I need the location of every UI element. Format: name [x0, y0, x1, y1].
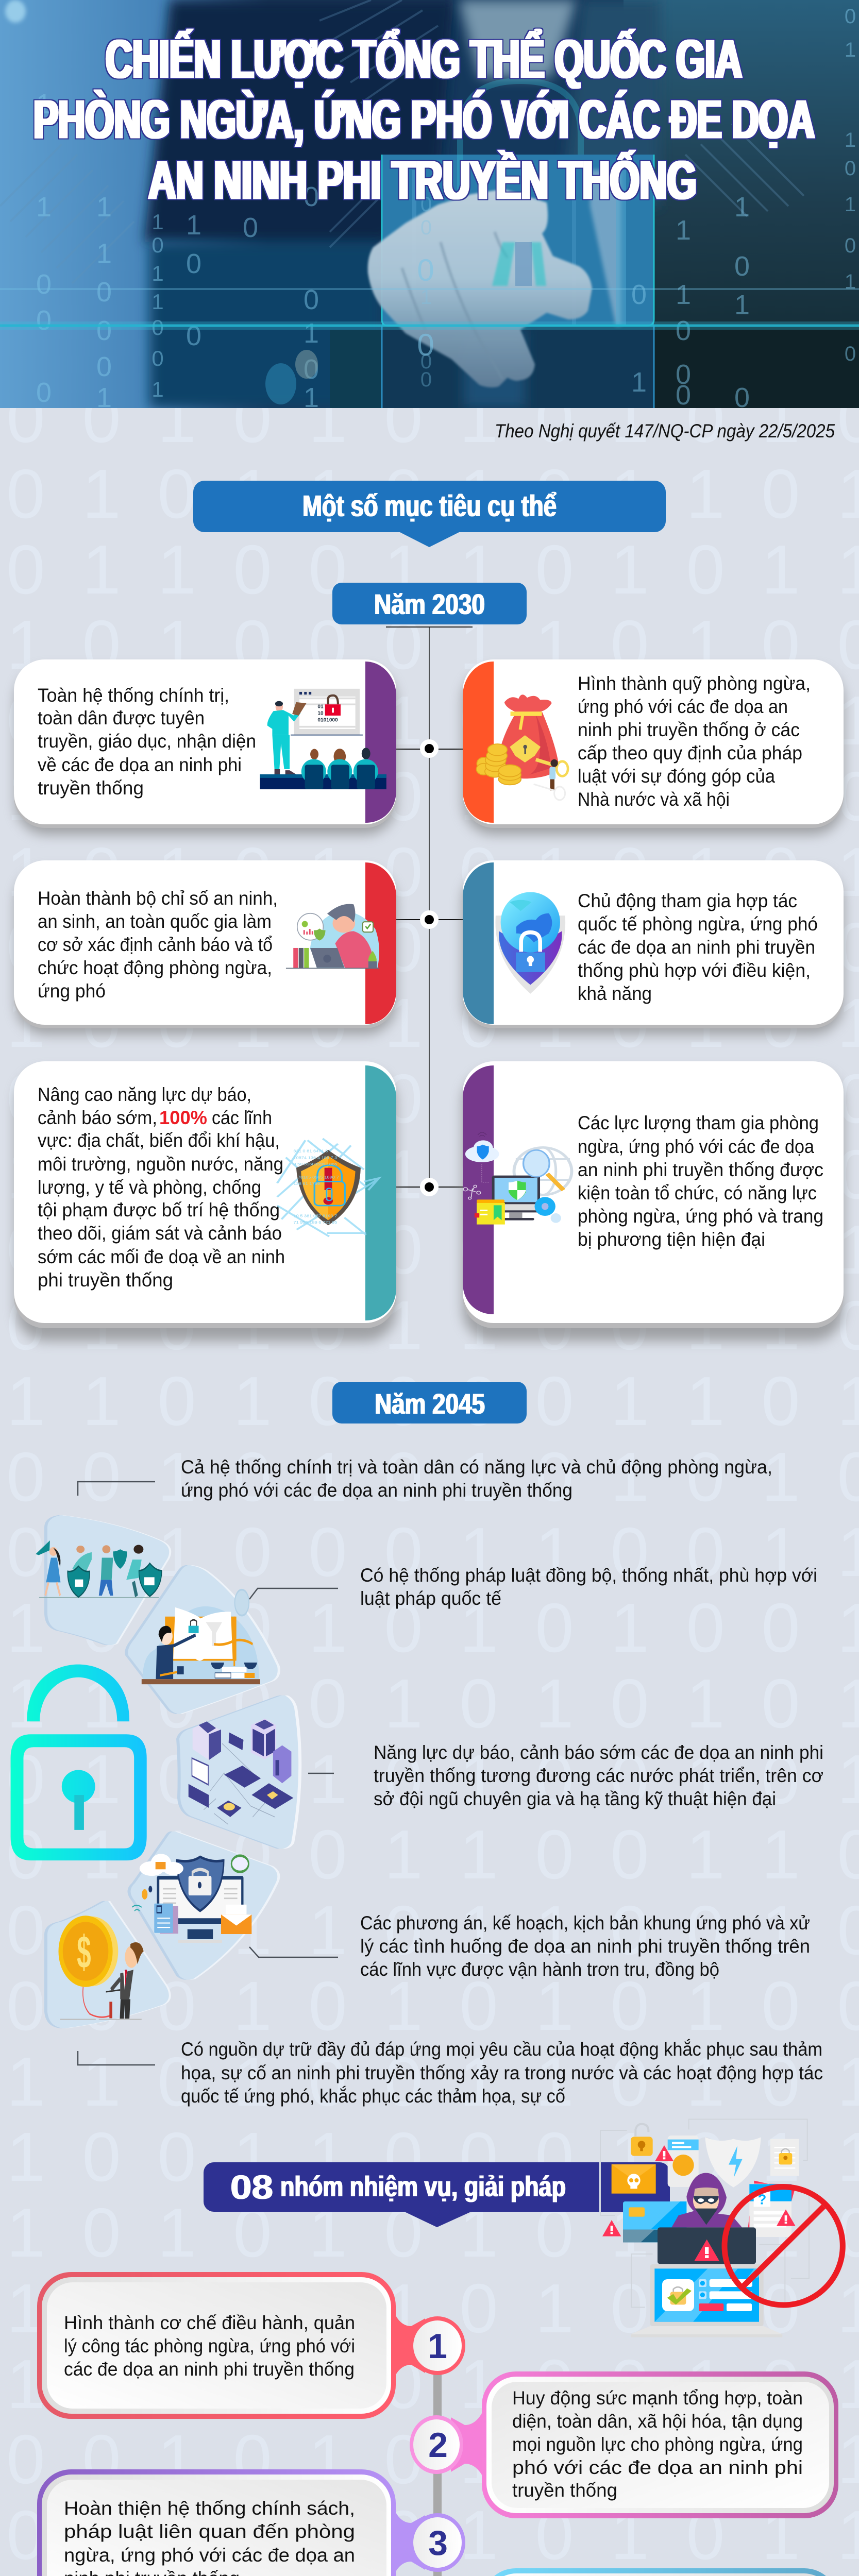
icon: orange security shield with padlock: 71 956 189 6 721 95: [293, 1220, 338, 1225]
card text: Nhà nước và xã hội: [578, 789, 730, 810]
binary digit background pattern: 010101001011: [6, 682, 859, 759]
card text: cơ sở xác định cảnh báo và tổ: [38, 934, 273, 955]
card text: tội phạm được bố trí hệ thống: [38, 1199, 280, 1221]
title: [33, 29, 815, 211]
card text: chức hoạt động phòng ngừa,: [38, 957, 272, 978]
petal 2: law, book and scale: [125, 1565, 280, 1714]
icon: orange security shield with padlock: 10574 136 4 185 7 3: [293, 1155, 338, 1160]
binary digit background pattern: 100010101001: [6, 1589, 859, 1667]
binary digit background pattern: 101010100101: [6, 2345, 859, 2423]
binary digit background pattern: 110010101010: [6, 757, 859, 835]
item text: pháp luật liên quan đến phòng: [64, 2521, 355, 2542]
text block 2045 item 3: truyền thống tương đương các nước phát triển, trên cơ: [374, 1765, 823, 1786]
binary digit background pattern: 101010101010: [6, 2194, 859, 2272]
card text: [38, 888, 278, 1002]
icon: orange security shield with padlock: 8 58 01603590 1865: [293, 1162, 338, 1166]
text block 2045 item 1: ứng phó với các đe dọa an ninh phi truyền thống: [181, 1480, 572, 1501]
icon: orange security shield with padlock: 631 0 81 6471 8 7: [293, 1149, 332, 1153]
item text: [512, 2387, 803, 2501]
icon: teacher presenting security to audience: 01: [317, 704, 324, 710]
text block 2045 item 3: sở đội ngũ chuyên gia và hạ tầng kỹ thuật hiện đại: [374, 1788, 776, 1809]
hero photo: hand touching a digital padlock: [0, 0, 859, 413]
card text: [578, 673, 811, 810]
text block 2045 item 4: [360, 1912, 810, 1980]
icon: orange security shield with padlock: 10 5 381 057 8190 7: [293, 1214, 338, 1218]
card text: các đe dọa an ninh phi truyền: [578, 937, 815, 958]
item 3: [37, 2469, 465, 2576]
text block 2045 item 2: [360, 1565, 817, 1609]
card text: toàn dân được tuyên: [38, 707, 205, 728]
binary digit background pattern: 101000110100: [6, 606, 859, 684]
hero glow lines: [0, 325, 859, 327]
card text: ứng phó: [38, 980, 106, 1002]
panel: card 3 left: [14, 1061, 396, 1341]
card text: [578, 1112, 823, 1250]
panel: card 2 right: [463, 860, 844, 1035]
pointing hand: 00: [417, 253, 434, 362]
card text: Chủ động tham gia hợp tác: [578, 890, 797, 911]
card text: kiện toàn tổ chức, có năng lực: [578, 1182, 817, 1204]
petal 1: people with shields: [36, 1515, 171, 1645]
text block 2045 item 2: luật pháp quốc tế: [360, 1588, 501, 1609]
icon: hacker with prohibition sign: ?: [758, 2191, 766, 2207]
binary digit background pattern: 001010101010: [6, 1438, 859, 1516]
card text: ứng phó với các đe dọa an: [578, 696, 788, 717]
year pill 2045: [332, 1382, 527, 1423]
card text: bị phương tiện hiện đại: [578, 1229, 765, 1250]
banner: 08 groups of tasks: nhóm nhiệm vụ, giải pháp: [280, 2170, 566, 2202]
text block 2045 item 4: lý các tình huống đe dọa an ninh phi truyền thống trên: [360, 1936, 810, 1957]
item text: Hoàn thiện hệ thống chính sách,: [64, 2498, 355, 2519]
icon: orange security shield with padlock: [277, 1139, 379, 1236]
banner: specific goals: [193, 481, 666, 547]
item text: phó với các đe dọa an ninh phi: [512, 2457, 803, 2478]
card text: theo dõi, giám sát và cảnh báo: [38, 1223, 282, 1244]
binary digit background pattern: 001010101010: [6, 379, 859, 457]
icon: orange security shield with padlock: 138 61 1789: [293, 1181, 320, 1186]
binary digit background pattern: 110011010101: [6, 2269, 859, 2347]
text block 2045 item 3: [374, 1742, 823, 1809]
hero binary columns: 110001: [96, 192, 112, 413]
icon: hacker with prohibition sign: [600, 2119, 843, 2337]
banner: specific goals: Một số mục tiêu cụ thể: [302, 489, 557, 523]
card text: Toàn hệ thống chính trị,: [38, 685, 229, 706]
binary digit background pattern: 110001010101: [6, 1665, 859, 1742]
timeline bar 08: [433, 2370, 442, 2576]
leader lines 2045: [78, 1482, 338, 2065]
padlock graphic: [11, 1665, 147, 1860]
card text: Nâng cao năng lực dự báo,: [38, 1084, 251, 1105]
banner: 08 groups of tasks: 08: [230, 2168, 273, 2206]
timeline dots 2030: [420, 739, 439, 1196]
card text: Các lực lượng tham gia phòng: [578, 1112, 819, 1133]
card text: môi trường, nguồn nước, năng: [38, 1154, 283, 1175]
panel: card 1 right: [463, 659, 844, 835]
binary digit background pattern: 011010010101: [6, 1211, 859, 1289]
hero binary columns: 0: [243, 212, 258, 243]
card text: an sinh, an toàn quốc gia làm: [38, 911, 272, 932]
item 1: 1: [428, 2327, 447, 2366]
icon: orange security shield with padlock: 78165 0965 1890 7: [298, 1175, 339, 1179]
text block 2045 item 5: họa, sự cố an ninh phi truyền thống xảy ra trong nước và các hoạt động hợp tác: [181, 2062, 823, 2083]
card text: sớm các mối đe doạ về an ninh: [38, 1246, 285, 1267]
binary digit background pattern: 001010100101: [6, 2420, 859, 2498]
hero binary columns: 01010: [304, 181, 319, 413]
hero binary columns: 1011001: [151, 210, 164, 401]
card text: cấp theo quy định của pháp: [578, 742, 802, 764]
hero binary columns: [36, 5, 856, 413]
card text: lượng, y tế và phòng, chống: [38, 1177, 261, 1198]
petal 4: cyber security monitor: [128, 1832, 280, 1980]
card text: phi truyền thống: [38, 1269, 173, 1291]
item text: ngừa, ứng phó với các đe dọa an: [64, 2545, 355, 2566]
panel: card 1 left: [14, 659, 396, 835]
card text: [38, 1084, 285, 1291]
year pill 2030: Năm 2030: [374, 588, 485, 620]
binary digit background pattern: 110100001101: [6, 1362, 859, 1440]
binary digit background pattern: 100110001011: [6, 2118, 859, 2196]
icon: teacher presenting security to audience: [260, 689, 386, 789]
card text: Hình thành quỹ phòng ngừa,: [578, 673, 811, 694]
card text: [578, 890, 818, 1004]
text block 2045 item 5: Có nguồn dự trữ đầy đủ đáp ứng mọi yêu cầu của hoạt động khắc phục sau thảm: [181, 2039, 822, 2060]
binary digit background pattern: 110100110101: [6, 2043, 859, 2121]
icon: man working on laptop with reports: [286, 904, 379, 968]
binary digit background pattern: 100101010101: [6, 984, 859, 1062]
hero binary columns: 1010: [734, 192, 750, 413]
text block 2045 item 5: [181, 2039, 823, 2107]
text block 2045 item 4: các lĩnh vực được vận hành trơn tru, đồng bộ: [360, 1959, 719, 1980]
timeline 2030: [386, 627, 473, 1187]
icon: teacher presenting security to audience: 10: [317, 710, 324, 717]
binary digit background pattern: 101001010110: [6, 1136, 859, 1213]
binary digit background pattern: 011010110100: [6, 908, 859, 986]
binary digit background pattern: 010110100110: [6, 1060, 859, 1138]
icon: monitor, magnifier, cloud and folder: [463, 1132, 571, 1225]
text block 2045 item 1: Cả hệ thống chính trị và toàn dân có năng lực và chủ động phòng ngừa,: [181, 1456, 772, 1478]
year pill 2030: [332, 583, 527, 624]
item text: các đe dọa an ninh phi truyền thống: [64, 2359, 355, 2380]
card text: về các đe dọa an ninh phi: [38, 754, 242, 775]
lock interior glow: [382, 155, 654, 326]
card text: luật với sự đóng góp của: [578, 766, 775, 787]
card text: truyền thống: [38, 777, 144, 799]
item text: Hình thành cơ chế điều hành, quản: [64, 2312, 355, 2333]
petal 5: coin balloon and businessman: [44, 1901, 171, 2028]
petal 3: digital infrastructure: [176, 1696, 301, 1849]
hero binary columns: 11000: [36, 89, 52, 408]
item text: [64, 2312, 355, 2380]
pointing hand: 00100: [420, 193, 432, 391]
binary digit background pattern: 011001100110: [6, 1816, 859, 1893]
card text: Hoàn thành bộ chỉ số an ninh,: [38, 888, 278, 909]
hero binary columns: 100: [186, 210, 201, 351]
item 2: 2: [428, 2426, 448, 2465]
card text: phòng ngừa, ứng phó và trang: [578, 1206, 823, 1227]
text block 2045 item 3: Năng lực dự báo, cảnh báo sớm các đe dọa an ninh phi: [374, 1742, 823, 1763]
item text: lý công tác phòng ngừa, ứng phó với: [64, 2335, 355, 2357]
hero binary columns: 01101010: [845, 5, 856, 365]
text block 2045 item 4: Các phương án, kế hoạch, kịch bản khung ứng phó và xử: [360, 1912, 810, 1934]
card text: vực: địa chất, biến đổi khí hậu,: [38, 1130, 280, 1151]
card text: [38, 685, 256, 799]
pointing hand: [368, 189, 592, 391]
item text: [64, 2498, 355, 2576]
binary digit background pattern: 000101010100: [6, 1967, 859, 2045]
icon: globe and padlock shield: [495, 892, 565, 994]
text block 2045 item 1: [181, 1456, 772, 1501]
binary digit background pattern: 010101100110: [6, 1286, 859, 1364]
icon: red money bag with coins and key: [476, 694, 568, 800]
card text: ngừa, ứng phó với các đe dọa: [578, 1136, 814, 1157]
binary digit background pattern: 010110101011: [6, 2496, 859, 2574]
hero binary columns: 01: [631, 279, 647, 398]
panel: card 3 right: [463, 1061, 844, 1341]
year pill 2045: Năm 2045: [375, 1387, 485, 1420]
icon: teacher presenting security to audience: 0101000: [317, 717, 338, 723]
hero binary columns: 11000: [676, 215, 691, 411]
item text: Huy động sức mạnh tổng hợp, toàn: [512, 2387, 803, 2409]
binary digit background pattern: 010110101101: [6, 455, 859, 533]
item text: mọi nguồn lực cho phòng ngừa, ứng: [512, 2434, 803, 2455]
binary digit background pattern: 010110100101: [6, 1740, 859, 1818]
binary digit background pattern: 011001101011: [6, 531, 859, 608]
card text: 100%: [159, 1107, 207, 1128]
item text: truyền thống: [512, 2480, 617, 2501]
padlock outline in hero: [382, 81, 654, 408]
banner: 08 groups of tasks: [204, 2162, 670, 2227]
binary digit background pattern: 101010010101: [6, 833, 859, 911]
card text: khả năng: [578, 983, 652, 1004]
card text: cảnh báo sớm,: [38, 1107, 157, 1128]
item 1: [37, 2272, 465, 2419]
item 4: [410, 2568, 838, 2576]
text block 2045 item 5: quốc tế ứng phó, khắc phục các thảm họa, sự cố: [181, 2086, 565, 2107]
item 2: [410, 2371, 838, 2518]
card text: các lĩnh: [212, 1107, 272, 1128]
card text: thống phù hợp với điều kiện,: [578, 960, 811, 981]
card text: quốc tế phòng ngừa, ứng phó: [578, 913, 818, 935]
petal panels with illustrations: [36, 1515, 301, 2028]
card text: truyền, giáo dục, nhận diện: [38, 731, 256, 752]
binary digit background pattern: 010110110010: [6, 1891, 859, 1969]
card text: an ninh phi truyền thống được: [578, 1159, 823, 1180]
item text: diện, toàn dân, xã hội hóa, tận dụng: [512, 2411, 803, 2432]
petal 5: coin balloon and businessman: $: [77, 1927, 91, 1978]
panel: card 2 left: [14, 860, 396, 1035]
binary digit background pattern: 011000110011: [6, 1513, 859, 1591]
hero hatch lines: [0, 0, 804, 283]
text block 2045 item 2: Có hệ thống pháp luật đồng bộ, thống nhất, phù hợp với: [360, 1565, 817, 1586]
card text: ninh phi truyền thống ở các: [578, 719, 800, 740]
item 3: 3: [428, 2523, 448, 2563]
